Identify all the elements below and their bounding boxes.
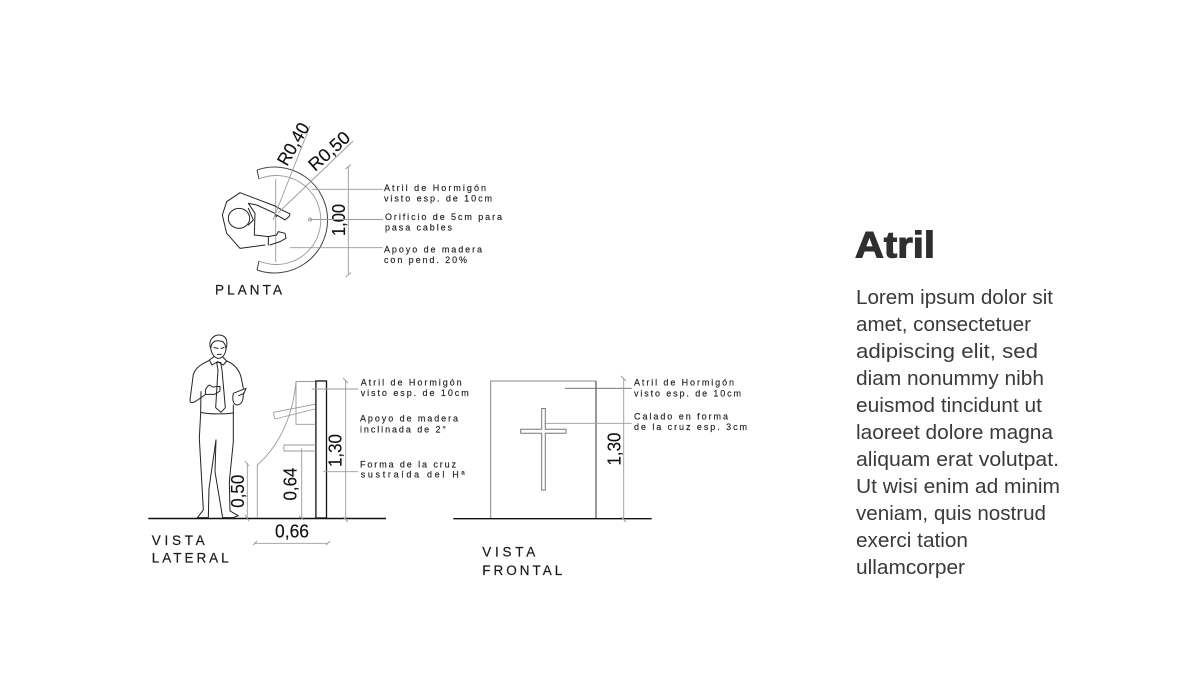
heading: Atril: [855, 224, 935, 265]
view title: vista lateral: LATERAL: [152, 551, 229, 566]
note: calado en forma: Calado en forma: [634, 411, 728, 421]
note: orificio: Orificio de 5cm para: [385, 212, 502, 222]
dimension line: [621, 376, 626, 522]
note: calado en forma: de la cruz esp. 3cm: [634, 422, 747, 432]
dimension 0,66: 0,66: [275, 522, 309, 542]
body text: diam nonummy nibh: [856, 368, 1044, 390]
cross opening: [521, 408, 566, 490]
view title: vista frontal: VISTA: [482, 545, 535, 560]
shelf: [284, 445, 316, 451]
ground line: [453, 518, 652, 520]
note: atril de hormigón: visto esp. de 10cm: [361, 388, 469, 398]
dimension 1,30: 1,30: [605, 432, 625, 466]
note: apoyo de madera: Apoyo de madera: [360, 414, 458, 424]
dimension 0,64: 0,64: [281, 468, 301, 500]
note: atril de hormigón: Atril de Hormigón: [384, 183, 486, 193]
note: atril de hormigón: Atril de Hormigón: [634, 378, 734, 388]
dimension R0,40: R0,40: [273, 119, 313, 169]
leader lines: [312, 389, 358, 472]
body text: laoreet dolore magna: [856, 422, 1054, 444]
body text: Lorem ipsum dolor sit: [856, 287, 1053, 309]
lectern front outline: [491, 381, 596, 518]
dimension 0,50: 0,50: [228, 475, 248, 508]
panel: planta drawing: [215, 119, 502, 297]
body text: Ut wisi enim ad minim: [856, 476, 1060, 498]
person seen from above: [222, 193, 290, 248]
view title: vista frontal: FRONTAL: [482, 563, 563, 578]
leader lines: [290, 189, 383, 248]
note: atril de hormigón: visto esp. de 10cm: [634, 389, 741, 399]
body text: adipiscing elit, sed: [856, 341, 1038, 363]
dimension R0,50: R0,50: [304, 127, 354, 175]
panel: vista lateral drawing: [148, 335, 469, 566]
standing person: [190, 335, 246, 518]
view title: planta: PLANTA: [215, 282, 282, 298]
note: atril de hormigón: Atril de Hormigón: [361, 378, 462, 388]
concrete post: [316, 381, 326, 518]
body text: exerci tation: [856, 530, 968, 552]
body text: aliquam erat volutpat.: [856, 449, 1059, 471]
lectern profile curve: [257, 382, 316, 518]
dimension 1,00: 1,00: [329, 204, 349, 236]
body text: amet, consectetuer: [856, 314, 1031, 336]
dimension lines: [245, 378, 348, 545]
wooden support: [273, 382, 316, 424]
lectern plan arcs: [257, 167, 328, 273]
leader lines: [565, 387, 632, 389]
note: apoyo de madera: con pend. 20%: [384, 255, 467, 265]
dimension line 1,00: [346, 164, 351, 277]
note: atril de hormigón: visto esp. de 10cm: [384, 194, 492, 204]
note: forma de la cruz: sustraída del Hª: [361, 470, 465, 480]
view title: vista lateral: VISTA: [152, 533, 205, 548]
note: apoyo de madera: inclinada de 2°: [360, 424, 446, 434]
body text: ullamcorper: [856, 557, 965, 579]
ground line: [148, 518, 386, 520]
body text: euismod tincidunt ut: [856, 395, 1042, 417]
panel: vista frontal drawing: [453, 376, 747, 578]
note: apoyo de madera: Apoyo de madera: [384, 244, 482, 254]
lectern right edge: [595, 381, 597, 518]
note: orificio: pasa cables: [385, 222, 452, 232]
note: forma de la cruz: Forma de la cruz: [360, 459, 456, 469]
body text: veniam, quis nostrud: [856, 503, 1046, 525]
radius leader lines: [273, 126, 353, 220]
dimension 1,30: 1,30: [326, 434, 346, 467]
